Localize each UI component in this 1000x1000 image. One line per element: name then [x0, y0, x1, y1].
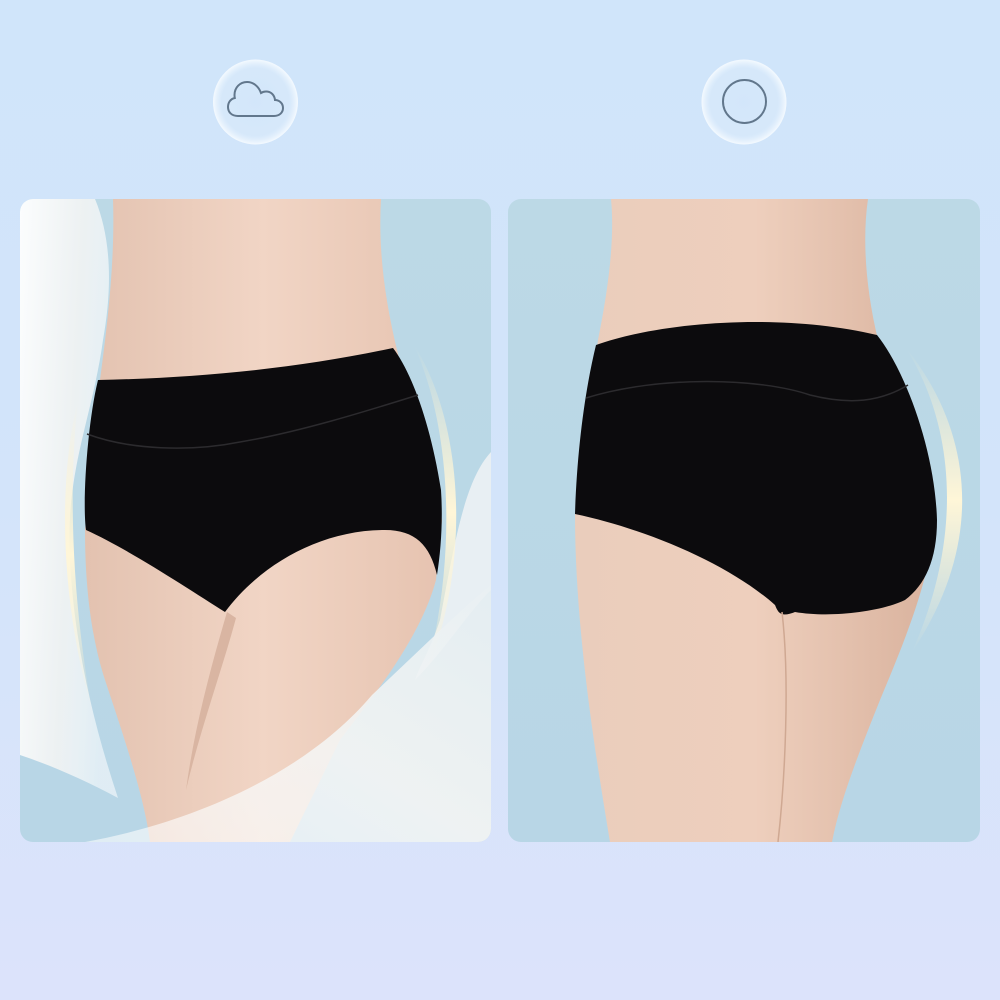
panel: front view [20, 199, 491, 842]
torso and legs, front [85, 199, 442, 842]
inner leg shadow [186, 612, 236, 790]
glow arc, right [422, 366, 456, 634]
panel: back view [508, 199, 980, 842]
waistband seam, front [87, 395, 418, 448]
garment, back [575, 322, 937, 614]
icon: cloud in bubble [213, 60, 298, 144]
white fabric, right edge [434, 452, 491, 636]
garment, front [85, 348, 442, 612]
icon: circle in bubble [702, 60, 786, 144]
glow arc, left [65, 438, 88, 690]
glow arc, back [918, 367, 962, 634]
white fabric, lower [85, 585, 491, 842]
white fabric, left [20, 199, 118, 798]
torso and legs, back [575, 199, 935, 842]
waistband seam, back [586, 382, 908, 401]
leg divider [778, 612, 786, 842]
